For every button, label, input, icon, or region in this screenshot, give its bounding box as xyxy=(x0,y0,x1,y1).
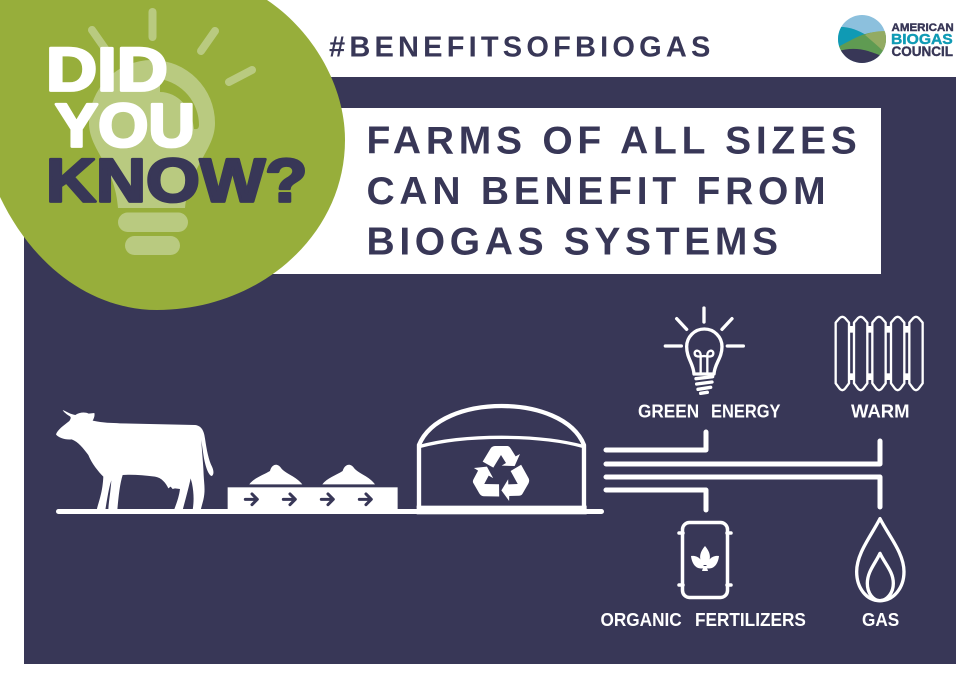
arrow: output pipes xyxy=(606,432,880,510)
hashtag heading: #BENEFITSOFBIOGAS xyxy=(329,32,715,64)
did you know text xyxy=(46,35,307,215)
icon: green energy bulb xyxy=(665,308,743,393)
icon: leaves xyxy=(691,546,719,571)
icon: fertilizer tank xyxy=(679,522,731,598)
logo: American Biogas Council: COUNCIL xyxy=(892,44,953,59)
panel: green did you know circle xyxy=(0,0,345,310)
headline text: BIOGAS SYSTEMS xyxy=(366,220,783,264)
panel: white headline box xyxy=(270,108,881,274)
icon: conveyor arrows xyxy=(245,494,371,505)
did you know text: KNOW? xyxy=(46,146,307,215)
label: organic fertilizers: ORGANIC xyxy=(600,609,682,630)
icon: feed heaps xyxy=(249,465,375,484)
label: green energy xyxy=(638,401,781,422)
label: green energy: ENERGY xyxy=(711,401,781,422)
logo: American Biogas Council xyxy=(838,15,954,63)
label: gas: GAS xyxy=(862,609,899,630)
headline text: CAN BENEFIT FROM xyxy=(366,170,830,213)
label: warm: WARM xyxy=(851,400,910,422)
icon: recycle symbol xyxy=(467,446,535,505)
icon: ground line xyxy=(58,509,602,514)
icon: feedstock conveyor xyxy=(228,465,398,511)
icon: radiator xyxy=(836,317,923,390)
icon: biogas digester xyxy=(417,406,587,514)
headline text: FARMS OF ALL SIZES xyxy=(366,120,862,162)
did you know text: DID xyxy=(46,35,168,103)
label: organic fertilizers: FERTILIZERS xyxy=(695,609,806,630)
label: green energy: GREEN xyxy=(638,401,699,422)
logo: American Biogas Council: BIOGAS xyxy=(891,32,953,48)
did you know text: YOU xyxy=(55,92,195,160)
label: organic fertilizers xyxy=(600,609,806,630)
icon: gas flame xyxy=(857,519,904,601)
icon: cow xyxy=(56,410,213,510)
icon: faint light bulb xyxy=(89,12,252,255)
logo: American Biogas Council: AMERICAN xyxy=(892,22,954,34)
headline text xyxy=(366,120,862,264)
